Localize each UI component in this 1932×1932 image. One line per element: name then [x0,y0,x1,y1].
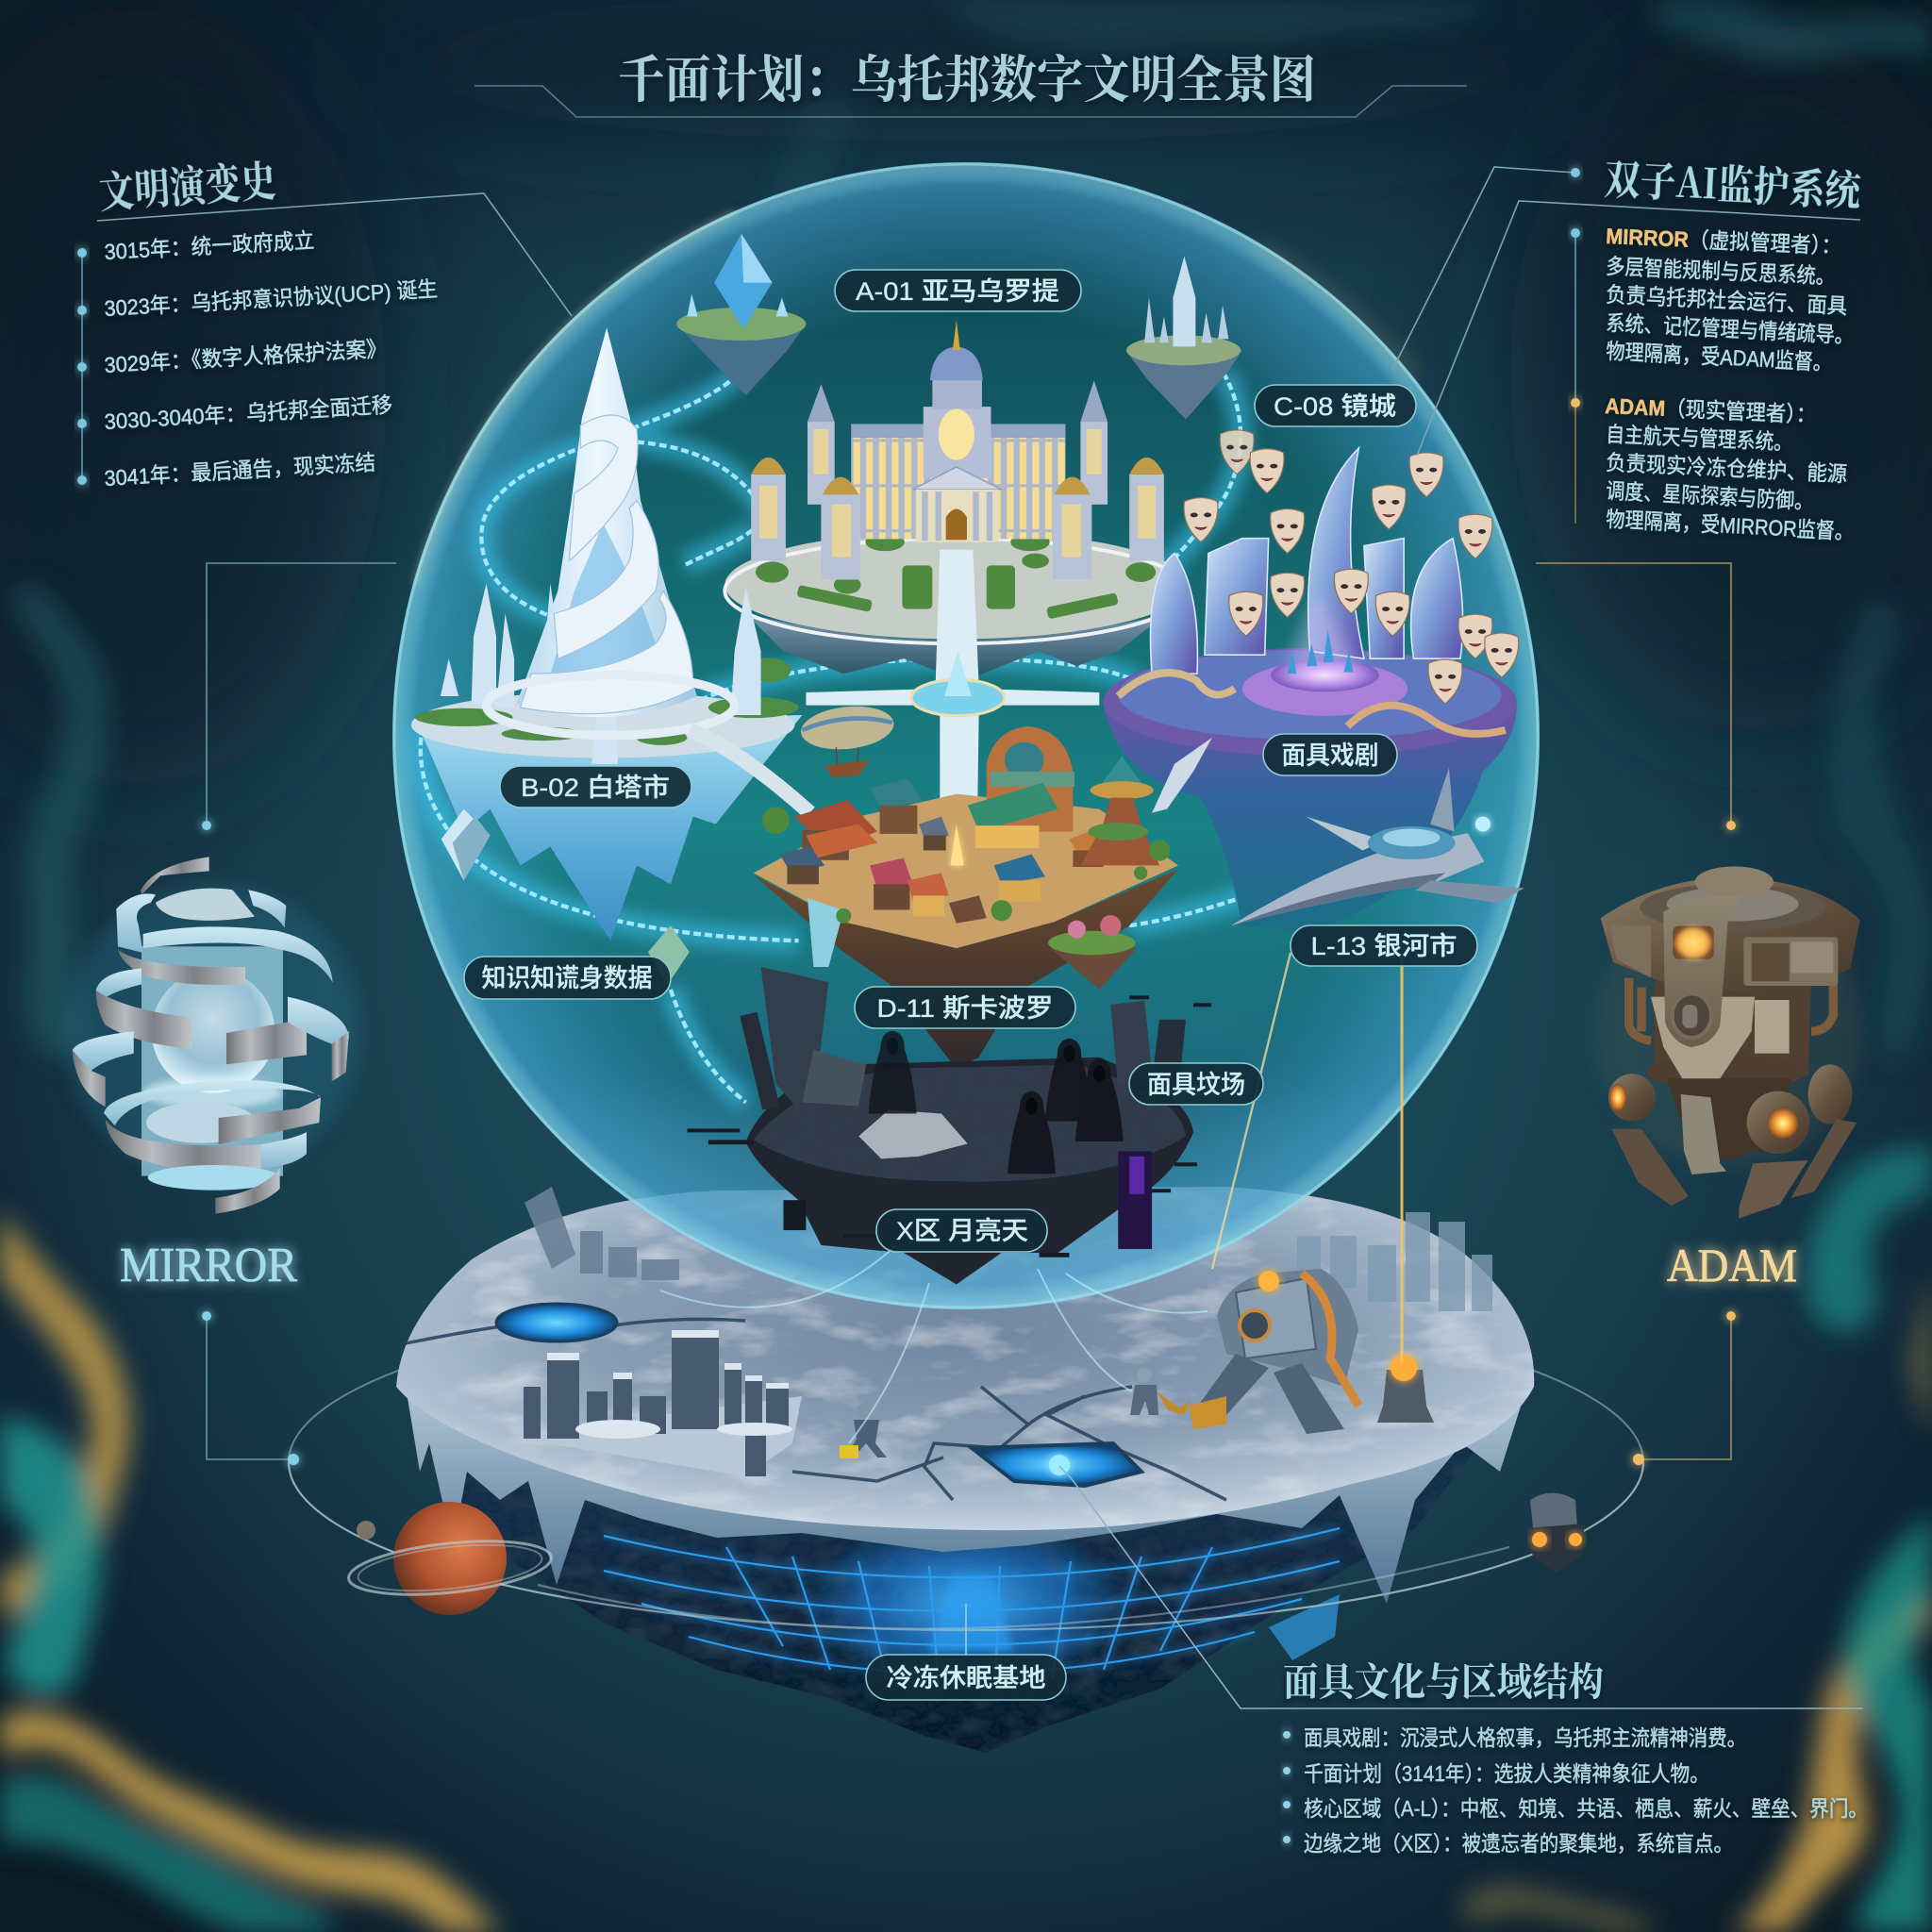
MIRROR description: 物理隔离，受ADAM监督。 [1606,339,1833,375]
label: B-02 [500,766,691,808]
ribbon [1347,706,1506,734]
curved towers [1151,448,1463,674]
ice base island [396,1187,1534,1753]
central tower [924,407,991,478]
underground cryo grid [604,1519,1340,1689]
large guild hall [968,726,1074,848]
side grid shard [1269,1594,1340,1660]
MIRROR connector lines [207,563,396,1459]
heading: 双子AI监护系统 [1603,145,1864,218]
hooded figures [869,1031,1124,1174]
A-01 palace platform [724,320,1188,809]
ADAM description: 自主航天与管理系统。 [1606,422,1793,455]
heading: 文明演变史 [96,146,277,220]
claws [1611,1129,1689,1206]
warm halo [1594,896,1865,1167]
timeline spine [81,253,83,480]
MIRROR description: MIRROR（虚拟管理者）： [1606,224,1842,258]
label: L-13 [1291,925,1477,966]
MIRROR label: MIRROR [120,1239,297,1292]
C-08 mirror city [1103,430,1519,933]
MIRROR description: 负责乌托邦社会运行、面具 [1606,282,1848,318]
label: knowledge [464,957,671,999]
rubble slabs [761,967,828,1109]
left panel: civilization timeline [77,146,572,491]
ruins top right [1297,1212,1492,1311]
label: L-13: L-13 银河市 [1311,932,1457,960]
orbiting drone [1526,1492,1585,1574]
central ice pit [972,1443,1141,1486]
label: C-08 [1255,385,1416,426]
market trees [762,807,1170,924]
timeline events [104,228,439,491]
central pit node [1049,1455,1070,1475]
walkway to mask city [1152,738,1212,813]
bottom panel: mask culture and regions [1059,1466,1868,1856]
list text: 边缘之地（X区）：被遗忘者的聚集地，系统盲点。 [1304,1831,1733,1856]
fountain plaza [911,680,1005,716]
statues rubble [858,1109,968,1158]
neck [1646,1055,1807,1090]
floating spire island right [1125,257,1242,420]
label: A-01: A-01 亚马乌罗提 [856,277,1059,306]
upper drum [1601,877,1860,991]
ruins top left [525,1187,679,1280]
tower ring [487,675,735,735]
timeline events: 3041年：最后通告，现实冻结 [104,450,376,491]
label: X zone [876,1209,1047,1252]
icicles [406,1368,1533,1604]
ADAM description [1605,393,1855,544]
icon: MIRROR core [64,857,360,1214]
ADAM description: 物理隔离，受MIRROR监督。 [1606,507,1855,544]
small crystal isle left [441,809,491,880]
waterfall [808,898,843,967]
title ornament lines [475,86,1467,117]
glitch pillar [1118,1151,1152,1249]
teal pagoda [1080,757,1159,865]
fountain [944,651,972,696]
Mars with rings [346,1502,554,1615]
list text: 核心区域（A-L）：中枢、知境、共语、栖息、薪火、壁垒、界门。 [1304,1796,1868,1821]
title: 千面计划：乌托邦数字文明全景图 [618,40,1316,112]
excavator machine [1189,1269,1358,1434]
stone bridge to market [690,730,809,813]
heading rule and leader [97,193,572,316]
ADAM description: 调度、星际探索与防御。 [1606,478,1814,514]
MIRROR description: 系统、记忆管理与情绪疏导。 [1606,310,1855,348]
orbit ring front [289,1462,1643,1630]
small crystal isle lower [648,925,690,986]
tower body [516,327,697,717]
gardens [756,533,1156,619]
far joint [1808,1064,1852,1124]
market island [754,726,1178,1069]
timeline nodes [77,248,87,485]
glass sphere dome [392,162,1540,1309]
label: A-01 [835,270,1081,311]
list text: 千面计划（3141年）：选拔人类精神象征人物。 [1304,1761,1709,1786]
frozen city [517,1330,802,1476]
label: mask theatre [1263,734,1397,775]
B-02 white tower island [411,327,802,941]
sphere contents [411,234,1524,1284]
MIRROR description [1606,224,1855,375]
island underside [415,1406,1509,1753]
ADAM connector lines [1536,563,1731,1459]
icon: ADAM robot [1594,866,1865,1219]
timeline events: 3023年：乌托邦意识协议(UCP) 诞生 [104,276,439,321]
palace road [806,550,1099,809]
ADAM label: ADAM [1667,1239,1797,1291]
left ice pit [496,1304,617,1341]
right panel: twin AI system [1392,145,1864,544]
MIRROR description: 多层智能规制与反思系统。 [1606,254,1836,289]
stage [1242,661,1407,716]
cryo label leader [965,1604,967,1655]
timeline events: 3015年：统一政府成立 [104,228,315,264]
timeline events: 3030-3040年：乌托邦全面迁移 [104,392,393,434]
starship [1231,768,1524,925]
wing towers [751,380,1164,579]
label: mask theatre: 面具戏剧 [1281,741,1379,770]
label: C-08: C-08 镜城 [1274,392,1396,421]
portico [913,467,1002,490]
list text [1304,1725,1868,1856]
label: mask graveyard: 面具坟场 [1147,1071,1245,1099]
label: D-11: D-11 斯卡波罗 [877,994,1053,1023]
leaders [1392,167,1860,456]
theatre ribbon left [1118,673,1235,696]
pipes [1629,978,1833,1044]
label: knowledge: 知识知谎身数据 [481,964,653,992]
orbit ring back [289,1294,1643,1630]
robot 2 [1130,1368,1191,1415]
ADAM description: ADAM（现实管理者）： [1605,393,1817,427]
label: B-02: B-02 白塔市 [521,774,670,802]
spine gold [1574,403,1576,524]
central faceplate [1663,896,1740,1047]
stage light [1284,591,1362,674]
beacon [1377,1355,1434,1423]
label: D-11 [855,987,1075,1028]
ADAM description: 负责现实冷冻仓维护、能源 [1606,450,1848,486]
small garden island [1048,915,1137,990]
label: cryo base [866,1655,1066,1700]
faceplate lamp glow [1677,927,1709,959]
glowing monument [950,824,964,865]
ice top surface [396,1187,1534,1530]
label: X zone: X区 月亮天 [896,1217,1028,1245]
lower armor shield [1651,997,1755,1078]
left side joint [1608,1074,1656,1121]
crystal spires [441,583,761,764]
right side joint [1747,1091,1809,1154]
glitch bars [687,995,1211,1257]
reality links [660,953,1402,1443]
performers [1288,630,1354,674]
market houses [780,779,1107,924]
airship [799,702,896,777]
robot 1 [840,1403,887,1458]
X-zone ruined island [687,967,1211,1284]
ice cracks [401,1319,1226,1500]
masks [1184,430,1519,704]
heading: 面具文化与区域结构 [1283,1651,1604,1707]
connector nodes [202,821,1736,1465]
leader and rule [1059,1466,1863,1708]
bullets [1283,1731,1291,1843]
energy streams [421,358,1291,1103]
label: cryo base: 冷冻休眠基地 [887,1664,1045,1692]
timeline events: 3029年：《数字人格保护法案》 [104,336,388,377]
floating crystal island left [676,234,806,395]
tower spiral bands [520,415,693,714]
bloom hatch [929,1575,1014,1651]
list text: 面具戏剧：沉浸式人格叙事，乌托邦主流精神消费。 [1304,1725,1746,1750]
label: mask graveyard [1129,1063,1263,1105]
core column [1654,978,1811,1075]
spine [1574,233,1576,403]
nodes [1571,168,1580,408]
glitch accent [1129,1157,1144,1194]
palace main block [851,424,1065,438]
